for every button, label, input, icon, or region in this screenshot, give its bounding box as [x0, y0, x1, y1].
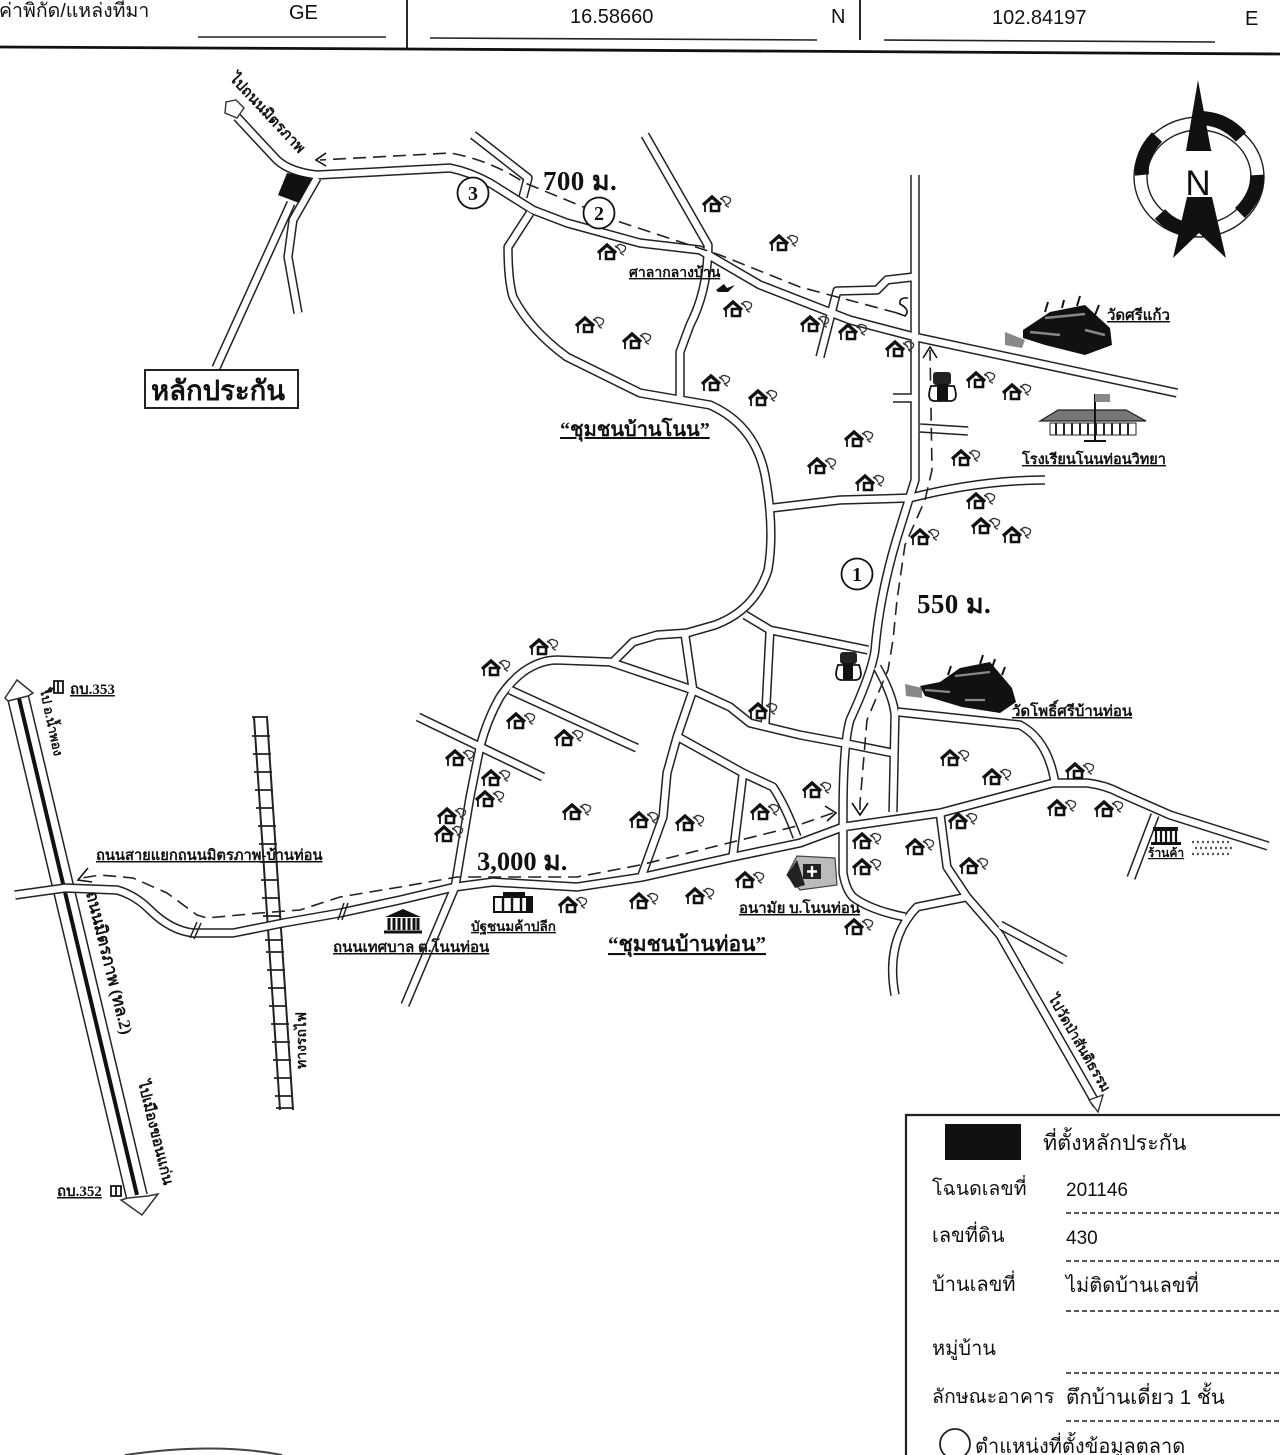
highway: Mittraphap road — [5, 680, 158, 1215]
landmark: shop and dotted field: ร้านค้า — [1148, 846, 1184, 860]
land number: เลขที่ดิน — [932, 1221, 1005, 1247]
route markers and distances — [458, 166, 991, 876]
landmark: health station: อนามัย บ.โนนท่อน — [739, 898, 861, 917]
label: village hall: ศาลากลางบ้าน — [629, 265, 721, 281]
label: to Nam Phong: ไป อ.น้ำพอง — [37, 685, 69, 757]
deed number: 201146 — [1066, 1180, 1128, 1201]
legend panel — [906, 1115, 1280, 1455]
arrow: to Mittraphap road — [225, 100, 244, 118]
longitude value: 102.84197 — [992, 7, 1087, 29]
house number — [932, 1270, 1199, 1297]
village: หมู่บ้าน — [932, 1338, 996, 1361]
label: to Mittraphap road: ไปถนนมิตรภาพ — [225, 67, 310, 157]
label: route 353: ถบ.353 — [70, 682, 115, 698]
label: Ban Non community: “ชุมชนบ้านโนน” — [560, 417, 710, 442]
icon: route 352 marker — [111, 1186, 121, 1196]
arrow: to Wat Pa Santi Tham — [1089, 1095, 1103, 1112]
label: junction road: ถนนสายแยกถนนมิตรภาพ-บ้านท่อน — [96, 847, 322, 864]
distance 550 m: 550 ม. — [917, 589, 991, 619]
label: to Khon Kaen: ไปเมืองขอนแก่น — [134, 1076, 179, 1187]
landmark: municipal office: ถนนเทศบาล ต.โนนท่อน — [333, 937, 490, 956]
deed number — [932, 1175, 1128, 1201]
distance 700 m: 700 ม. — [543, 166, 617, 196]
road network — [15, 117, 1268, 1105]
houses — [435, 196, 1123, 935]
longitude unit: E — [1245, 8, 1258, 30]
landmark: Non Thon Witthaya school — [1021, 394, 1166, 468]
house number: บ้านเลขที่ — [932, 1270, 1016, 1296]
landmark: grocery shop: บัฐชนมค้าปลีก — [471, 919, 556, 936]
icon: shrine south — [836, 652, 861, 680]
label: Ban Thon community: “ชุมชนบ้านท่อน” — [608, 932, 766, 958]
collateral label box: หลักประกัน — [151, 375, 285, 406]
compass rose — [1134, 80, 1264, 258]
landmark: Wat Si Kaeo temple — [1005, 296, 1170, 355]
source value: GE — [289, 2, 318, 24]
building type: ลักษณะอาคาร — [932, 1386, 1054, 1408]
label: railway: ทางรถไฟ — [292, 1012, 310, 1069]
house number: ไม่ติดบ้านเลขที่ — [1064, 1271, 1199, 1297]
landmark: grocery shop — [471, 892, 556, 936]
legend title: ที่ตั้งหลักประกัน — [1043, 1127, 1187, 1155]
deed number: โฉนดเลขที่ — [932, 1175, 1027, 1200]
land number: 430 — [1066, 1228, 1098, 1249]
label: Mittraphap road: ถนนมิตรภาพ (ทล.2) — [82, 889, 136, 1036]
marker 3: 3 — [468, 183, 478, 205]
latitude unit: N — [831, 6, 845, 28]
marker 1 — [842, 558, 872, 590]
icon: route 353 marker — [45, 681, 63, 693]
landmark: Non Thon Witthaya school: โรงเรียนโนนท่อนวิทยา — [1021, 450, 1166, 468]
landmark: health station — [739, 856, 861, 917]
header label: ค่าพิกัด/แหล่งที่มา — [0, 0, 149, 22]
landmark: Wat Pho Si Ban Thon temple: วัดโพธิ์ศรีบ้านท่อน — [1012, 699, 1133, 720]
landmark: Wat Si Kaeo temple: วัดศรีแก้ว — [1107, 307, 1170, 324]
label: route 352: ถบ.352 — [57, 1184, 102, 1200]
arrow: north end — [5, 680, 33, 701]
highway labels — [37, 681, 1115, 1200]
label: to Wat Pa Santi Tham: ไปวัดป่าสันติธรรม — [1044, 989, 1115, 1095]
dashed route with arrows — [78, 153, 937, 918]
landmark: municipal office — [333, 909, 490, 956]
collateral location marker — [278, 173, 312, 203]
railway — [252, 717, 294, 1110]
market data marker — [940, 1429, 1185, 1455]
bottom-left compass arc — [125, 1448, 282, 1455]
latitude value: 16.58660 — [570, 6, 653, 28]
marker 1: 1 — [852, 564, 862, 586]
icon: shrine north — [929, 372, 956, 401]
landmark: Wat Pho Si Ban Thon temple — [905, 655, 1133, 720]
arrow: south end — [121, 1194, 158, 1215]
marker 3 — [458, 178, 488, 208]
compass rose: N — [1185, 164, 1211, 203]
marker 2: 2 — [594, 203, 604, 225]
legend swatch — [945, 1124, 1021, 1160]
building type: ตึกบ้านเดี่ยว 1 ชั้น — [1066, 1382, 1225, 1409]
land number — [932, 1221, 1098, 1249]
building type — [932, 1382, 1225, 1409]
landmark: shop and dotted field — [1148, 827, 1233, 860]
header: coordinates table — [0, 0, 1280, 54]
marker 2 — [584, 198, 614, 228]
distance 3000 m: 3,000 ม. — [477, 846, 567, 876]
landmark: village shop — [716, 284, 735, 292]
